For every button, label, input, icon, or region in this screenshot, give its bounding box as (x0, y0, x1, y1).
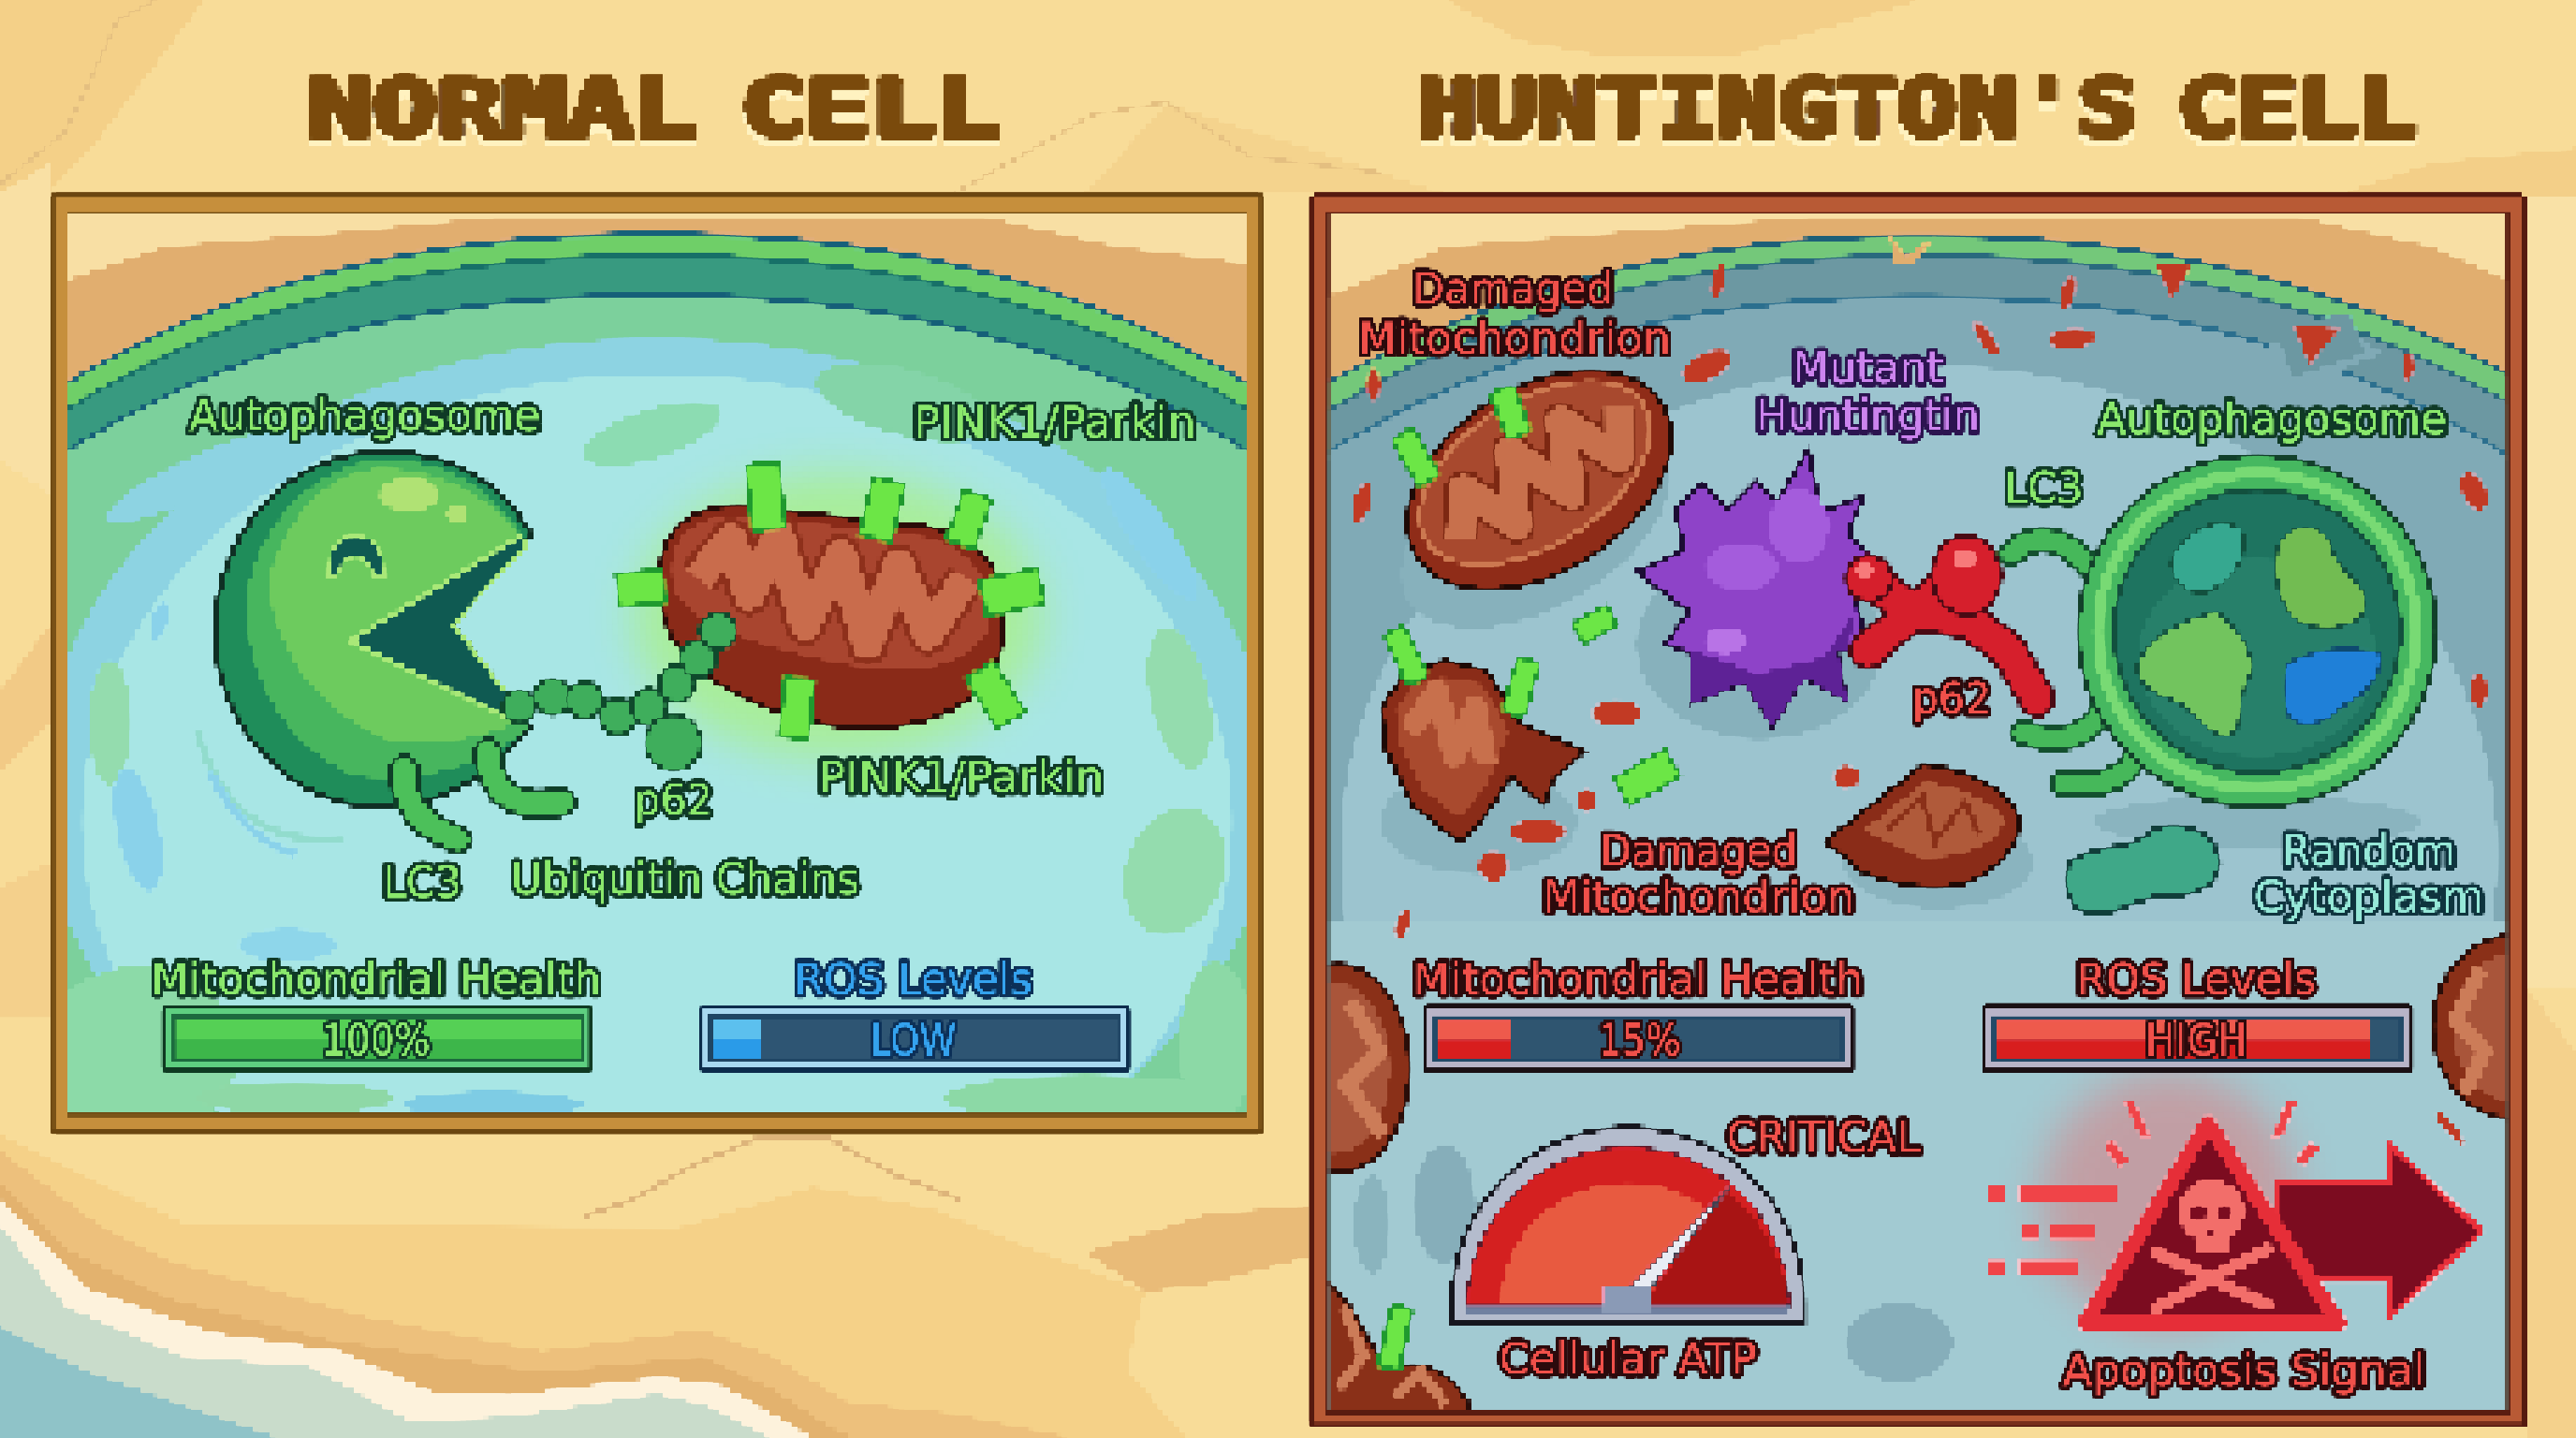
label: Autophagosome: Autophagosome (2097, 393, 2447, 444)
label: Random Cytoplasm (2254, 826, 2484, 922)
bar: mitochondrial health 100% (162, 1005, 593, 1072)
title: huntington's cell: HUNTINGTON'S CELL (1417, 64, 2417, 155)
cellular ATP gauge (1452, 1127, 1804, 1323)
label: Damaged Mitochondrion top (1358, 264, 1671, 363)
value: 15%: 15% (1599, 1015, 1680, 1065)
mutant huntingtin aggregate (1636, 448, 1881, 726)
green PINK1 debris and red fragments (1349, 263, 2493, 1147)
label: Apoptosis Signal: Apoptosis Signal (2062, 1345, 2425, 1396)
panel frame (50, 194, 1265, 1132)
label: Cellular ATP: Cellular ATP (1499, 1334, 1757, 1385)
label: p62: p62 (634, 775, 713, 826)
label: Random Cytoplasm: Random (2282, 826, 2456, 876)
p62 red linker (1847, 536, 2037, 698)
label: CRITICAL: CRITICAL (1727, 1112, 1921, 1163)
arrow (2276, 1144, 2482, 1318)
value: LOW: LOW (871, 1015, 956, 1065)
label: Mutant Huntingtin: Huntingtin (1756, 390, 1980, 441)
panel: normal cell (51, 192, 1264, 1135)
label: Mitochondrial Health: Mitochondrial Health (151, 954, 601, 1005)
bar: ROS levels high (1982, 1005, 2413, 1073)
damaged cell interior and membrane (1329, 215, 2507, 1410)
label: Autophagosome: Autophagosome (189, 390, 540, 441)
bar: mitochondrial health 15% (1424, 1005, 1854, 1073)
PINK1 tags on damaged mitochondrion (1391, 385, 1530, 487)
label: Random Cytoplasm: Cytoplasm (2254, 872, 2484, 922)
label: ROS Levels: ROS Levels (795, 954, 1032, 1005)
label: LC3: LC3 (2004, 462, 2083, 513)
bar: ROS levels low (699, 1005, 1130, 1072)
label: LC3: LC3 (383, 857, 461, 907)
label: PINK1/Parkin top: PINK1/Parkin (914, 397, 1196, 448)
label: Mitochondrial Health: Mitochondrial Health (1412, 954, 1863, 1005)
label: Damaged Mitochondrion lower: Damaged (1600, 826, 1797, 876)
label: Damaged Mitochondrion lower: Mitochondrion (1543, 872, 1854, 922)
skull and crossbones (2156, 1180, 2267, 1308)
cell interior and membrane (67, 213, 1247, 1112)
label: PINK1/Parkin bottom: PINK1/Parkin (818, 752, 1104, 802)
side mitochondria fragments (1268, 935, 2576, 1416)
label: Mutant Huntingtin: Mutant (1793, 343, 1943, 393)
title: normal cell: NORMAL CELL (307, 64, 1001, 155)
label: Ubiquitin Chains: Ubiquitin Chains (511, 854, 859, 904)
broken mitochondrion left (1382, 625, 1584, 844)
autophagosome pac-man (215, 452, 531, 807)
autophagosome with contents (2078, 455, 2437, 807)
LC3 tails (404, 753, 562, 840)
mitochondrion with PINK1/Parkin tags (616, 462, 1045, 761)
PINK1/Parkin tags (616, 462, 1045, 740)
ubiquitin chain beads (503, 613, 736, 770)
panel frame (1310, 194, 2526, 1428)
damaged mitochondrion top (1368, 325, 1710, 635)
label: Mutant Huntingtin (1756, 343, 1980, 441)
apoptosis signal (1989, 1072, 2482, 1328)
warning triangle (2085, 1123, 2339, 1323)
broken mitochondrion lower (1825, 764, 2019, 888)
LC3 arms (2011, 539, 2143, 785)
label: Damaged Mitochondrion top: Damaged (1412, 264, 1613, 315)
panel: huntington's cell (1268, 194, 2576, 1428)
random cytoplasm blob (2066, 826, 2219, 914)
label: p62: p62 (1912, 673, 1991, 724)
label: ROS Levels: ROS Levels (2076, 954, 2317, 1005)
alert rays and speed dashes (1989, 1101, 2320, 1277)
label: Damaged Mitochondrion lower (1543, 826, 1854, 922)
value: 100%: 100% (322, 1015, 431, 1065)
label: Damaged Mitochondrion top: Mitochondrion (1358, 313, 1671, 363)
value: HIGH: HIGH (2145, 1015, 2247, 1065)
